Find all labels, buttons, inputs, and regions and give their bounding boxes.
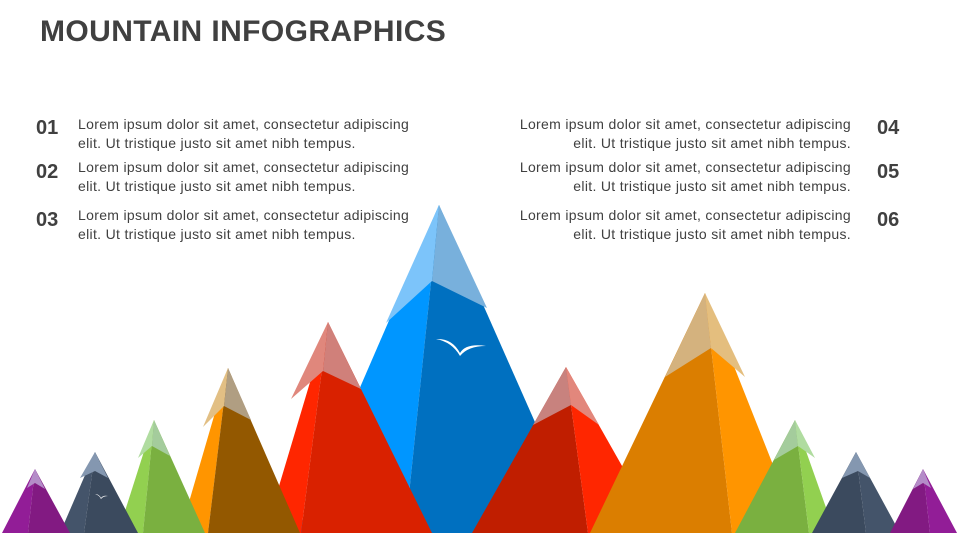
text 03: Lorem ipsum dolor sit amet, consectetur adipiscing elit. Ut tristique justo sit amet nibh tempus. bbox=[78, 207, 409, 242]
item 03: 03 bbox=[36, 209, 58, 231]
item 04: 04 bbox=[877, 117, 899, 139]
mountain: dark left bbox=[60, 452, 138, 533]
mountain: purple left bbox=[2, 469, 70, 533]
text 02: Lorem ipsum dolor sit amet, consectetur adipiscing elit. Ut tristique justo sit amet nibh tempus. bbox=[78, 159, 409, 194]
mountain: dark right bbox=[812, 452, 900, 533]
icon: bird large bbox=[436, 339, 486, 356]
mountain: purple right bbox=[890, 469, 957, 533]
mountain: blue center bbox=[297, 205, 584, 533]
text 05: Lorem ipsum dolor sit amet, consectetur adipiscing elit. Ut tristique justo sit amet nibh tempus. bbox=[520, 159, 851, 194]
mountain: orange right bbox=[590, 293, 800, 533]
title: MOUNTAIN INFOGRAPHICS bbox=[40, 15, 446, 48]
mountain: red right bbox=[472, 367, 660, 533]
icon: bird small bbox=[95, 494, 108, 499]
mountain: red left bbox=[265, 322, 432, 533]
text 04: Lorem ipsum dolor sit amet, consectetur adipiscing elit. Ut tristique justo sit amet nibh tempus. bbox=[520, 116, 851, 151]
text 01: Lorem ipsum dolor sit amet, consectetur adipiscing elit. Ut tristique justo sit amet nibh tempus. bbox=[78, 116, 409, 151]
item 02: 02 bbox=[36, 161, 58, 183]
item 01: 01 bbox=[36, 117, 58, 139]
item 06: 06 bbox=[877, 209, 899, 231]
mountain: orange left bbox=[180, 368, 300, 533]
mountain: green right bbox=[735, 420, 835, 533]
text 06: Lorem ipsum dolor sit amet, consectetur adipiscing elit. Ut tristique justo sit amet nibh tempus. bbox=[520, 207, 851, 242]
item 05: 05 bbox=[877, 161, 899, 183]
mountain: green left bbox=[118, 420, 205, 533]
